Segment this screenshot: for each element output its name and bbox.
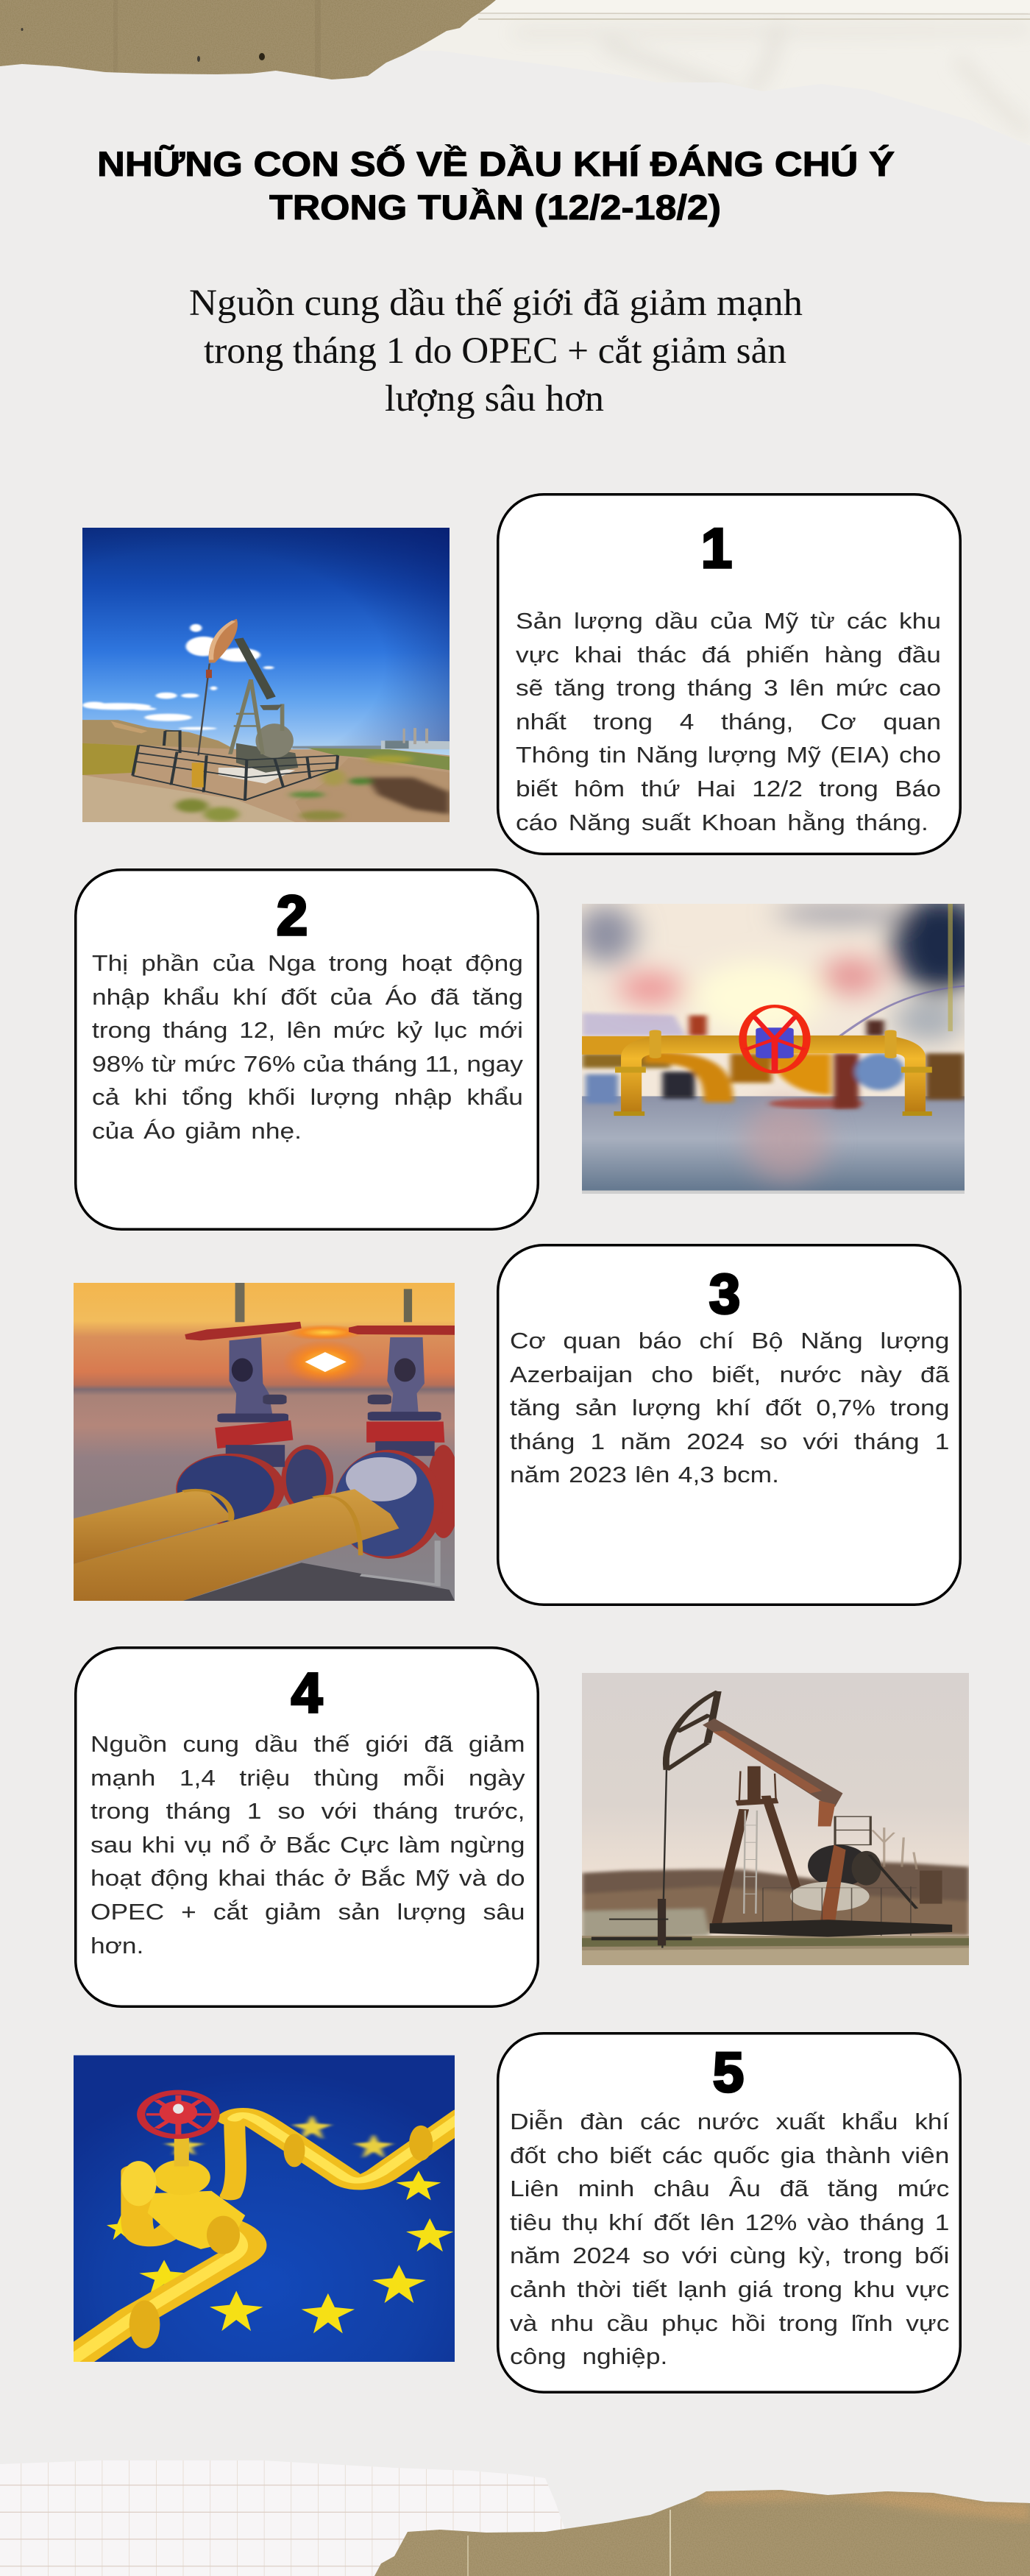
card 1 body text: Thông tin Năng lượng Mỹ (EIA) cho [516, 742, 941, 768]
subtitle: trong tháng 1 do OPEC + cắt giảm sản [204, 330, 786, 372]
number 5: 5 [713, 2042, 744, 2104]
card 2 body text: 98% từ mức 76% của tháng 11, ngay [92, 1051, 523, 1077]
card 3 [497, 1244, 962, 1606]
torn paper header [0, 0, 1030, 129]
card 4 body text: sau khi vụ nổ ở Bắc Cực làm ngừng [90, 1832, 525, 1858]
number 3: 3 [709, 1263, 740, 1326]
card 1 body text: cáo Năng suất Khoan hằng tháng. [516, 810, 928, 835]
subtitle [189, 283, 803, 420]
card 1 [497, 493, 962, 855]
card 2 body text: của Áo giảm nhẹ. [92, 1118, 302, 1144]
card 3 body text: tháng 1 năm 2024 so với tháng 1 [509, 1429, 949, 1454]
card 3 body text: tăng sản lượng khí đốt 0,7% trong [509, 1395, 949, 1420]
card 2 body text [92, 950, 523, 1144]
number 4: 4 [291, 1662, 322, 1724]
title [97, 144, 895, 227]
photo: oil pumpjack under blue sky [82, 528, 450, 822]
card 4 body text: OPEC + cắt giảm sản lượng sâu [90, 1899, 525, 1925]
card 5 body text: và nhu cầu phục hồi trong lĩnh vực [510, 2310, 949, 2336]
card 2 body text: trong tháng 12, lên mức kỷ lục mới [92, 1017, 523, 1043]
subtitle: lượng sâu hơn [385, 378, 604, 420]
card 1 body text: sẽ tăng trong tháng 3 lên mức cao [516, 675, 941, 701]
card 4 body text: Nguồn cung dầu thế giới đã giảm [90, 1731, 525, 1757]
card 4 [74, 1646, 539, 2008]
card 4 body text: trong tháng 1 so với tháng trước, [90, 1798, 525, 1824]
card 5 body text: cảnh thời tiết lạnh giá trong khu vực [510, 2276, 949, 2302]
card 5 [497, 2032, 962, 2393]
photo: pipeline valves at sunset [74, 1283, 455, 1601]
card 2 body text: Thị phần của Nga trong hoạt động [92, 950, 523, 976]
title: TRONG TUẦN (12/2-18/2) [269, 188, 721, 227]
card 5 body text [510, 2109, 949, 2369]
card 5 body text: công nghiệp. [510, 2343, 667, 2369]
card 5 body text: năm 2024 so với cùng kỳ, trong bối [510, 2243, 949, 2268]
number 2: 2 [277, 885, 308, 947]
title: NHỮNG CON SỐ VỀ DẦU KHÍ ĐÁNG CHÚ Ý [97, 144, 895, 183]
card 3 body text: Azerbaijan cho biết, nước này đã [509, 1362, 949, 1387]
photo: yellow pipeline over EU flag [74, 2055, 455, 2362]
card 5 body text: tiêu thụ khí đốt lên 12% vào tháng 1 [510, 2209, 949, 2235]
card 4 body text: mạnh 1,4 triệu thùng mỗi ngày [90, 1765, 525, 1791]
card 2 body text: nhập khẩu khí đốt của Áo đã tăng [92, 984, 523, 1010]
card 5 body text: Diễn đàn các nước xuất khẩu khí [510, 2109, 949, 2134]
card 4 body text: hoạt động khai thác ở Bắc Mỹ và do [90, 1865, 525, 1891]
card 1 body text: Sản lượng dầu của Mỹ từ các khu [516, 608, 941, 634]
subtitle: Nguồn cung dầu thế giới đã giảm mạnh [189, 283, 803, 324]
photo: yellow gas pipe with red valve wheel [582, 904, 965, 1194]
card 4 body text [90, 1731, 525, 1958]
card 3 body text: Cơ quan báo chí Bộ Năng lượng [509, 1328, 949, 1354]
card 1 body text [516, 608, 941, 835]
card 1 body text: nhất trong 4 tháng, Cơ quan [516, 709, 941, 735]
card 3 body text: năm 2023 lên 4,3 bcm. [509, 1462, 778, 1487]
number 1: 1 [701, 517, 732, 580]
card 2 [74, 868, 539, 1231]
card 1 body text: vực khai thác đá phiến hàng đầu [516, 642, 941, 668]
card 2 body text: cả khi tổng khối lượng nhập khẩu [92, 1084, 523, 1110]
card 1 body text: biết hôm thứ Hai 12/2 trong Báo [516, 776, 941, 802]
photo: rusty pumpjack under cloudy sky [582, 1673, 969, 1965]
card 4 body text: hơn. [90, 1933, 143, 1958]
card 5 body text: Liên minh châu Âu đã tăng mức [510, 2176, 949, 2201]
torn paper footer [0, 2460, 1030, 2576]
card 5 body text: đốt cho biết các quốc gia thành viên [510, 2142, 949, 2168]
card 3 body text [509, 1328, 949, 1487]
